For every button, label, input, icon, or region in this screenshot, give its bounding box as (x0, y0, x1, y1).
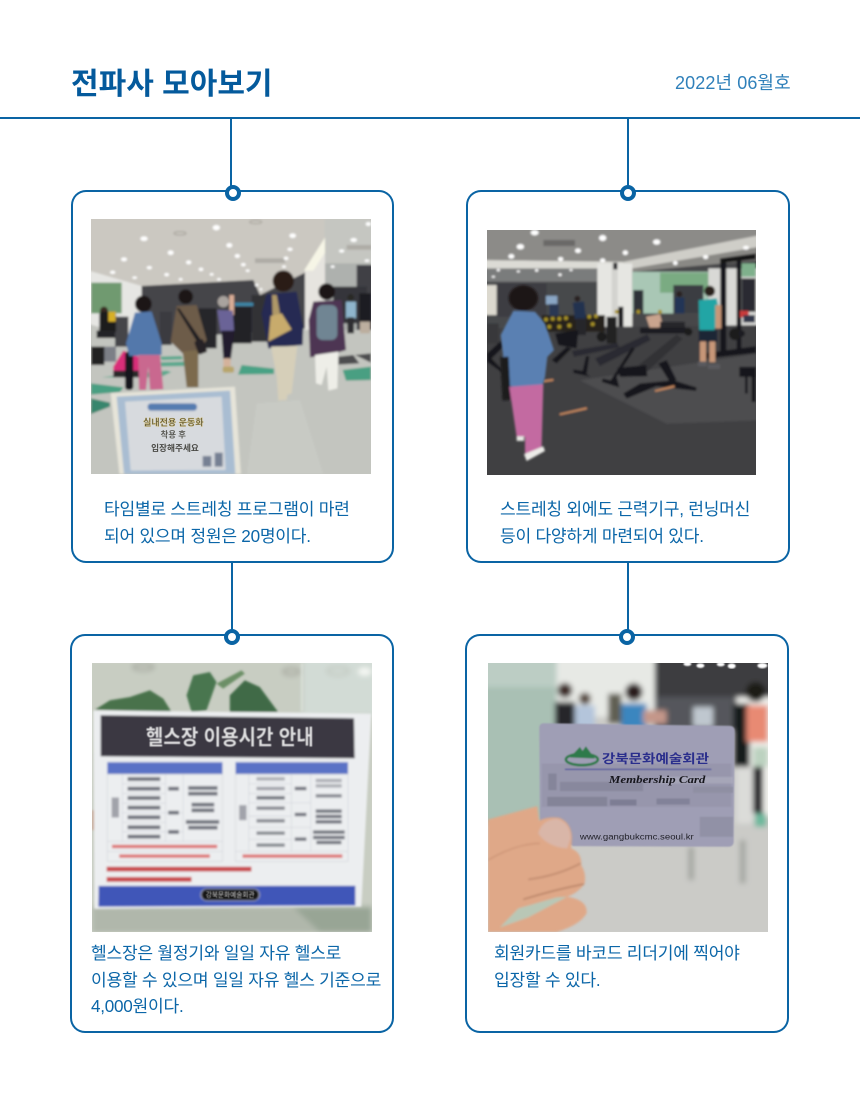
caption: membership card (494, 944, 740, 990)
title: 전파사 모아보기 (71, 68, 273, 101)
left gym user (91, 347, 116, 362)
membership card (539, 723, 735, 847)
figure arms raised (217, 295, 235, 373)
figure with tote bag (262, 270, 303, 401)
pink crouching figure (113, 351, 140, 377)
lights (492, 230, 749, 278)
person in teal (698, 286, 721, 369)
mats (160, 356, 183, 360)
distant people (574, 296, 580, 302)
floor tape (559, 407, 587, 415)
poster (93, 710, 371, 909)
ceiling lights (110, 222, 371, 291)
photo: gym hours poster (92, 663, 372, 932)
connector: header to card 2 (627, 118, 629, 188)
caption: membership card: 회원카드를 바코드 리더기에 찍어야 (494, 944, 740, 963)
hours tables (107, 762, 223, 774)
connector dot: card 4 (619, 629, 635, 645)
photo: stretching room (91, 219, 371, 474)
benches (487, 330, 756, 402)
caption: gym hours: 이용할 수 있으며 일일 자유 헬스 기준으로 (91, 971, 381, 990)
caption: stretching program: 되어 있으며 정원은 20명이다. (104, 527, 311, 546)
caption: gym hours (91, 944, 381, 1016)
distant figures (346, 302, 356, 318)
foreground woman in denim shirt (500, 285, 554, 461)
caption: strength equipment: 등이 다양하게 마련되어 있다. (500, 527, 704, 546)
blurred people (558, 683, 572, 698)
header rule (0, 117, 860, 119)
lying person on bench (646, 314, 663, 328)
card name: 강북문화예술회관 (602, 751, 709, 766)
equipment (198, 308, 217, 348)
panel: gym hours (70, 634, 394, 1033)
caption: stretching program: 타임별로 스트레칭 프로그램이 마련 (104, 500, 350, 519)
floor reflections (247, 400, 323, 474)
dumbbell racks (542, 315, 605, 332)
panel: membership card (465, 634, 789, 1033)
caption: gym hours: 4,000원이다. (91, 997, 183, 1016)
connector dot: card 3 (224, 629, 240, 645)
photo: membership card in hand (224, 632, 768, 932)
caption: stretching program (104, 500, 350, 546)
sign text (143, 417, 204, 453)
card logo (570, 746, 595, 759)
connector dot: card 1 (225, 185, 241, 201)
card URL: www.gangbukcmc.seoul.kr (579, 832, 694, 841)
chairs (688, 847, 694, 880)
sign board (111, 387, 241, 474)
issue date: 2022년 06월호 (675, 73, 791, 93)
connector: header to card 1 (230, 118, 232, 188)
caption: strength equipment: 스트레칭 외에도 근력기구, 런닝머신 (500, 500, 750, 519)
connector: card 1 to card 3 (231, 562, 233, 632)
card label: Membership Card (608, 775, 707, 786)
caption: membership card: 입장할 수 있다. (494, 971, 600, 990)
figure with backpack (309, 283, 346, 391)
sign text: 착용 후 (161, 430, 186, 440)
plant (95, 690, 172, 712)
caption: gym hours: 헬스장은 월정기와 일일 자유 헬스로 (91, 944, 341, 963)
figure in blue shirt (126, 296, 163, 390)
poster heading: 헬스장 이용시간 안내 (146, 726, 314, 750)
photo: weight machines (487, 230, 756, 475)
hand (488, 806, 587, 932)
figure in floral top (171, 289, 208, 387)
racks at right (720, 260, 726, 354)
sign text: 실내전용 운동화 (143, 417, 204, 428)
panel: strength equipment (466, 190, 790, 563)
sign text: 입장해주세요 (151, 442, 199, 453)
poster footer label: 강북문화예술회관 (206, 890, 255, 899)
caption: strength equipment (500, 500, 750, 546)
connector: card 2 to card 4 (627, 562, 629, 632)
connector dot: card 2 (620, 185, 636, 201)
panel: stretching program (71, 190, 394, 563)
